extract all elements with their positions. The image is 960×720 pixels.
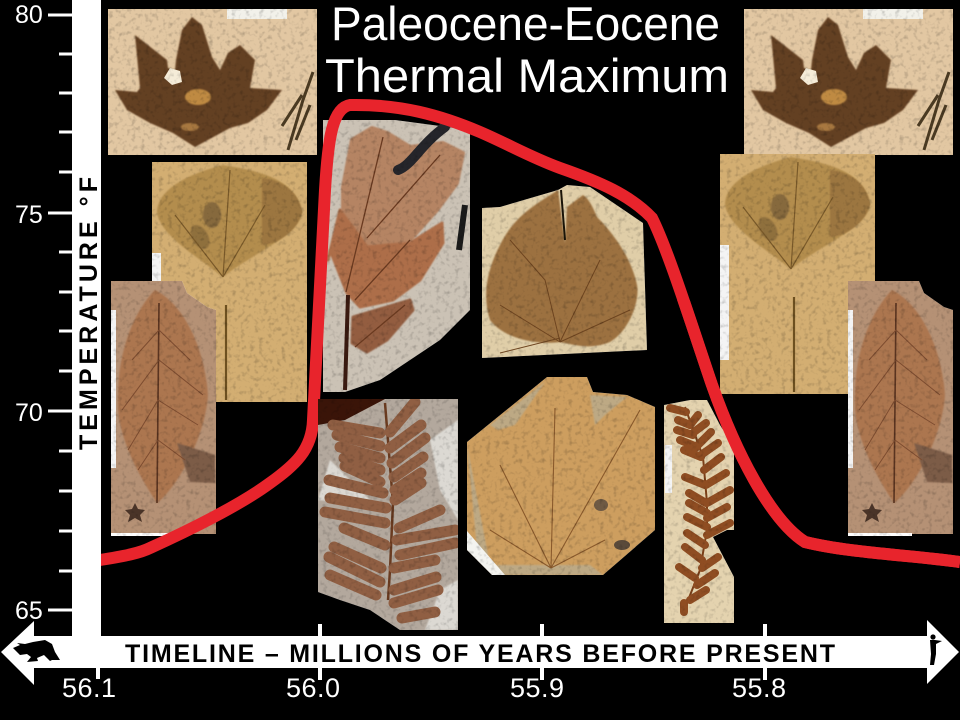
fossil: maple leaf, top left [108, 9, 317, 155]
fossil: heart-shaped leaf, centre [482, 185, 647, 358]
title [325, 0, 729, 102]
fossil: poplar leaf, right [720, 154, 875, 394]
timeline labels: 56.1 [62, 673, 116, 703]
temperature axis [15, 0, 103, 640]
fossil: small fern frond [664, 400, 734, 623]
fossil: maple leaf, top right [744, 9, 953, 155]
timeline ticks [98, 624, 765, 680]
fossil: lobed tan leaf [467, 377, 655, 575]
fossil: compound leaf on grey rock [323, 120, 470, 392]
fossil: poplar leaf, left [152, 162, 307, 402]
timeline title: TIMELINE – MILLIONS OF YEARS BEFORE PRESENT [125, 640, 835, 668]
title: Thermal Maximum [325, 49, 729, 102]
timeline arrow [1, 620, 959, 703]
major and minor ticks [48, 15, 72, 610]
temperature curve [100, 105, 960, 562]
icon: human silhouette [930, 634, 942, 665]
axis bar [72, 0, 101, 640]
timeline arrow: 55.9 [510, 673, 564, 703]
fossil: elm leaf, right [848, 281, 953, 536]
timeline arrow: 56.0 [286, 673, 340, 703]
icon: early mammal silhouette [13, 640, 60, 662]
tick labels: 80 [15, 1, 43, 29]
temperature axis: 70 [15, 399, 43, 427]
red curve segment over small fern [677, 300, 960, 568]
temperature axis: 75 [15, 201, 43, 229]
timeline arrow: 55.8 [732, 673, 786, 703]
axis title: TEMPERATURE °F [75, 177, 103, 450]
fossil: large fern frond [318, 399, 458, 630]
temperature axis: 65 [15, 597, 43, 625]
fossil: elm leaf, left [111, 281, 216, 536]
